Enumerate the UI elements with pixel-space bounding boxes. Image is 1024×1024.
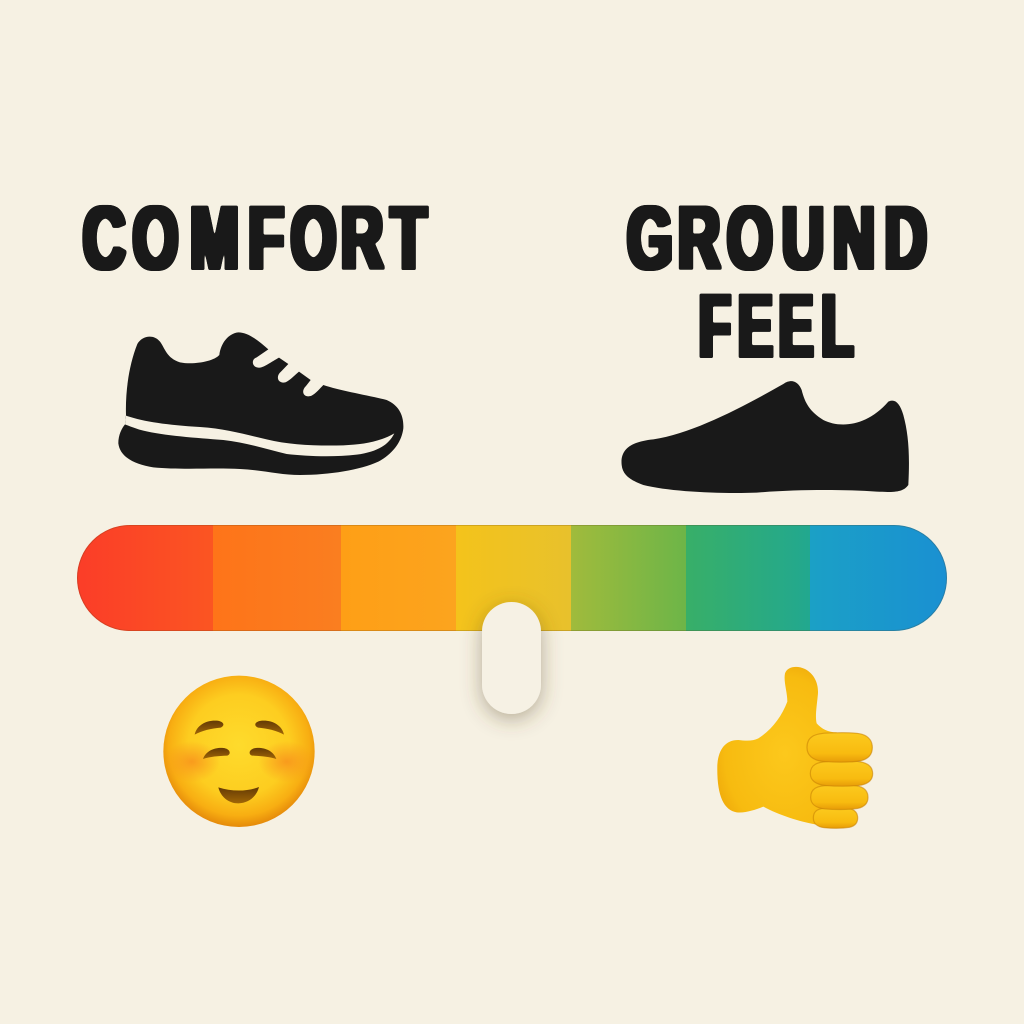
heading: ground feel [627, 188, 927, 376]
icon: cushioned running shoe [118, 332, 403, 475]
icon: smiling face emoji [163, 676, 315, 827]
slider knob [482, 602, 541, 714]
heading: ground feel: FEEL [699, 277, 853, 376]
rainbow slider bar [77, 525, 947, 631]
smile [218, 787, 259, 803]
heading: ground feel: GROUND [627, 188, 927, 287]
eyes and brows [195, 721, 223, 735]
white midsole stripe [125, 416, 394, 456]
icon: thumbs up emoji [717, 667, 873, 828]
cheeks [163, 741, 220, 782]
icon: minimal flat shoe [621, 381, 909, 493]
fingers [807, 733, 873, 828]
heading: comfort: COMFORT [83, 188, 427, 287]
